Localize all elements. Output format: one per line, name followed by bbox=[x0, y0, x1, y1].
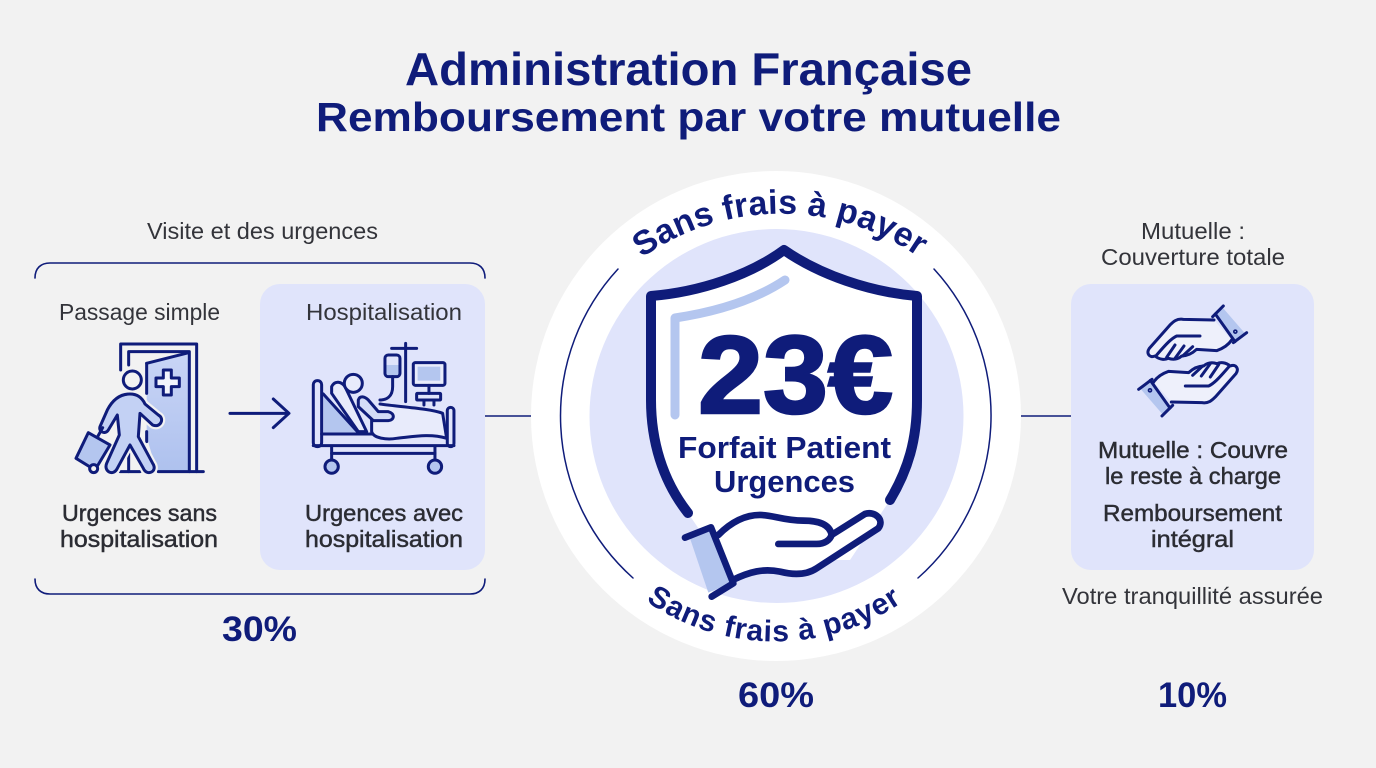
heading: mutuelle couverture totale: Couverture totale bbox=[1101, 244, 1285, 270]
panel: mutuelle bbox=[1062, 218, 1323, 715]
text: mutuelle couvre le reste à charge bbox=[1098, 437, 1288, 489]
label: forfait patient urgences bbox=[678, 430, 891, 499]
icon: shield bbox=[651, 250, 917, 560]
caption: urgences sans hospitalisation bbox=[60, 500, 218, 552]
text: remboursement intégral: Remboursement bbox=[1103, 500, 1283, 526]
icon: patient entering door with suitcase bbox=[76, 344, 203, 473]
card: mutuelle background bbox=[1071, 284, 1314, 570]
text: remboursement intégral: intégral bbox=[1151, 526, 1234, 552]
text: mutuelle couvre le reste à charge: le reste à charge bbox=[1105, 463, 1281, 489]
icon: two hands bbox=[1139, 306, 1247, 416]
curved text: top: Sans frais à payer bbox=[633, 189, 928, 254]
curved text: bottom: Sans frais à payer bbox=[648, 586, 898, 642]
text: mutuelle couvre le reste à charge: Mutuelle : Couvre bbox=[1098, 437, 1288, 463]
panel: central badge bbox=[531, 171, 1021, 715]
badge: light blue disc bbox=[590, 229, 964, 603]
ring: thin arcs bbox=[561, 269, 991, 578]
label: hospitalisation: Hospitalisation bbox=[306, 299, 462, 325]
heading: mutuelle couverture totale bbox=[1101, 218, 1285, 270]
caption: urgences avec hospitalisation bbox=[305, 500, 463, 552]
title: Administration Française bbox=[405, 43, 972, 95]
icon: upper hand bbox=[1148, 306, 1247, 359]
connector: centre to right bbox=[1021, 415, 1071, 417]
amount: 23€: 23€ bbox=[698, 314, 893, 437]
text: votre tranquillité assurée: Votre tranquillité assurée bbox=[1062, 583, 1323, 609]
label: passage simple: Passage simple bbox=[59, 299, 220, 325]
caption: urgences sans hospitalisation: hospitalisation bbox=[60, 526, 218, 552]
heading: visite et des urgences: Visite et des urgences bbox=[147, 218, 378, 244]
panel: visite et urgences bbox=[35, 218, 485, 649]
stat: 60%: 60% bbox=[738, 676, 814, 715]
icon: patient in hospital bed bbox=[313, 343, 454, 473]
stat: 10%: 10% bbox=[1158, 676, 1227, 715]
caption: urgences sans hospitalisation: Urgences sans bbox=[62, 500, 217, 526]
caption: urgences avec hospitalisation: hospitalisation bbox=[305, 526, 463, 552]
badge: white disc bbox=[531, 171, 1021, 661]
caption: urgences avec hospitalisation: Urgences avec bbox=[305, 500, 463, 526]
icon: lower hand bbox=[1139, 363, 1237, 416]
title: Remboursement par votre mutuelle bbox=[316, 94, 1061, 140]
arrow: passage to hospitalisation bbox=[230, 399, 289, 428]
connector: left to centre bbox=[485, 415, 531, 417]
bracket: top and bottom bbox=[35, 263, 485, 594]
stat: 30%: 30% bbox=[222, 610, 297, 649]
label: forfait patient urgences: Forfait Patient bbox=[678, 430, 891, 465]
card: hospitalisation background bbox=[260, 284, 485, 570]
heading: mutuelle couverture totale: Mutuelle : bbox=[1141, 218, 1245, 244]
icon: open hand bbox=[685, 513, 880, 597]
label: forfait patient urgences: Urgences bbox=[714, 464, 855, 499]
title bbox=[316, 43, 1061, 140]
text: remboursement intégral bbox=[1103, 500, 1283, 552]
